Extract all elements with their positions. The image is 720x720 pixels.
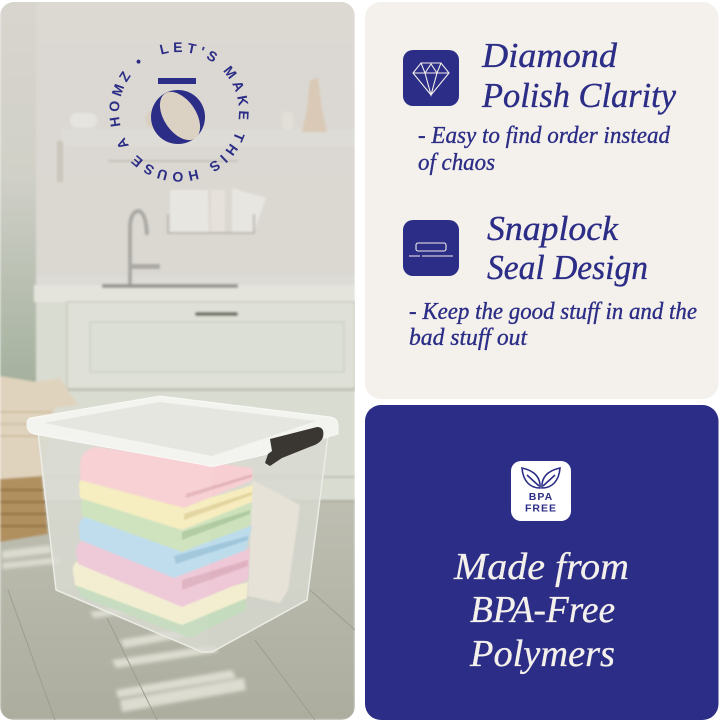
icon: BPA free badge xyxy=(511,461,571,521)
logo badge xyxy=(110,42,249,182)
panel: features xyxy=(365,2,718,399)
statement: BPA-Free xyxy=(470,589,615,631)
heading: Snaplock xyxy=(487,209,619,248)
kitchen background xyxy=(0,0,355,720)
circular slogan: • LET'S MAKE THIS HOUSE A HOMZ xyxy=(110,42,249,182)
description: - Keep the good stuff in and the xyxy=(409,299,697,325)
box lid xyxy=(27,396,338,466)
feature: diamond polish clarity xyxy=(403,36,676,176)
heading: Seal Design xyxy=(487,248,648,287)
statement: Polymers xyxy=(469,633,615,675)
statement: Made from xyxy=(453,546,629,588)
icon: seal xyxy=(403,220,459,276)
plastic storage box xyxy=(27,396,338,653)
box front haze xyxy=(38,434,213,653)
icon: BPA free badge: BPA xyxy=(529,491,553,503)
description: of chaos xyxy=(418,150,495,176)
folded towels xyxy=(73,447,253,638)
panel: product photo xyxy=(0,0,355,720)
description: - Easy to find order instead xyxy=(418,123,671,149)
heading: Polish Clarity xyxy=(481,76,676,115)
description: bad stuff out xyxy=(409,325,528,351)
logo mark xyxy=(151,78,208,147)
floor sunlight patches xyxy=(2,545,246,712)
feature: snaplock seal design xyxy=(403,209,697,351)
white pillow xyxy=(248,480,300,603)
panel: BPA free xyxy=(365,405,718,720)
icon: BPA free badge: FREE xyxy=(525,502,557,514)
black latch handle xyxy=(265,427,323,466)
box body xyxy=(38,432,328,652)
floor tile lines xyxy=(8,590,355,720)
heading: Diamond xyxy=(481,36,618,75)
icon: diamond xyxy=(403,50,459,106)
